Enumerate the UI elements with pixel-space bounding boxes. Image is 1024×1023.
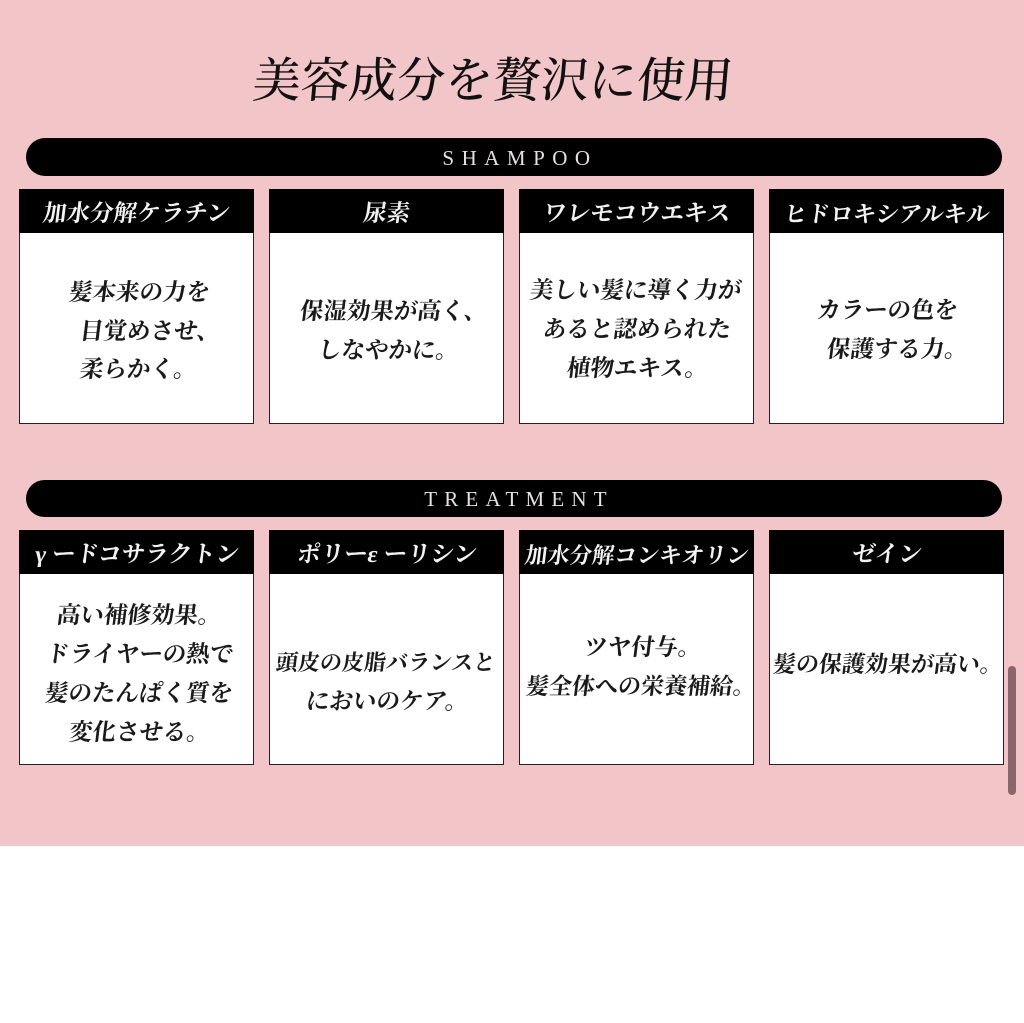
card text: 変化させる。 — [67, 720, 212, 746]
card text: 柔らかく。 — [78, 357, 199, 383]
card text: あると認められた — [541, 317, 733, 343]
card text — [525, 635, 758, 699]
shampoo banner — [26, 138, 1002, 176]
card heading — [519, 189, 754, 233]
card heading: 加水分解コンキオリン — [523, 543, 750, 568]
card heading: 尿素 — [361, 201, 412, 227]
card text — [43, 603, 235, 746]
card text: 美しい髪に導く力が — [528, 278, 743, 304]
card text: においのケア。 — [304, 689, 470, 715]
card text: 保護する力。 — [825, 337, 970, 363]
card heading: 加水分解ケラチン — [42, 201, 232, 227]
card heading: ゼイン — [850, 542, 923, 568]
card text — [67, 280, 222, 383]
card text: 目覚めさせ、 — [78, 319, 222, 345]
card heading — [19, 530, 254, 574]
card text — [528, 278, 743, 382]
card heading — [769, 189, 1004, 233]
card text: 保湿効果が高く、 — [298, 299, 489, 325]
card heading: ワレモコウエキス — [541, 201, 732, 227]
card: polylysine — [269, 530, 504, 765]
card text: ドライヤーの熱で — [44, 642, 235, 668]
card text — [275, 650, 497, 715]
card text: 頭皮の皮脂バランスと — [275, 650, 497, 675]
card text — [815, 298, 970, 363]
shampoo banner: SHAMPOO — [442, 146, 598, 170]
title: 美容成分を贅沢に使用 — [251, 55, 735, 108]
card heading — [269, 189, 504, 233]
card text: 髪の保護効果が高い。 — [772, 652, 1005, 677]
scrollbar — [1008, 666, 1016, 795]
card heading: ポリーε ーリシン — [295, 542, 478, 568]
card text: 髪本来の力を — [67, 280, 212, 306]
treatment banner — [26, 480, 1002, 517]
card text: 植物エキス。 — [565, 356, 710, 382]
card: zein — [769, 530, 1004, 765]
card text: しなやかに。 — [316, 338, 461, 364]
card heading — [519, 530, 754, 574]
card: urea — [269, 189, 504, 424]
card heading: γ ードコサラクトン — [33, 542, 240, 568]
card heading — [19, 189, 254, 233]
card heading — [769, 530, 1004, 574]
card: hydrolyzed keratin — [19, 189, 254, 424]
card text: ツヤ付与。 — [582, 635, 703, 661]
card text: 髪全体への栄養補給。 — [525, 674, 758, 699]
card heading: ヒドロキシアルキル — [782, 202, 991, 227]
card text — [298, 299, 489, 364]
card: hydroxyalkyl — [769, 189, 1004, 424]
card text: 高い補修効果。 — [55, 603, 223, 629]
card text: カラーの色を — [815, 298, 960, 324]
card: gamma-docosalactone — [19, 530, 254, 765]
treatment banner: TREATMENT — [424, 487, 614, 511]
card: horsetail extract — [519, 189, 754, 424]
card: hydrolyzed conchiolin — [519, 530, 754, 765]
card heading — [269, 530, 504, 574]
card text: 髪のたんぱく質を — [43, 681, 235, 707]
